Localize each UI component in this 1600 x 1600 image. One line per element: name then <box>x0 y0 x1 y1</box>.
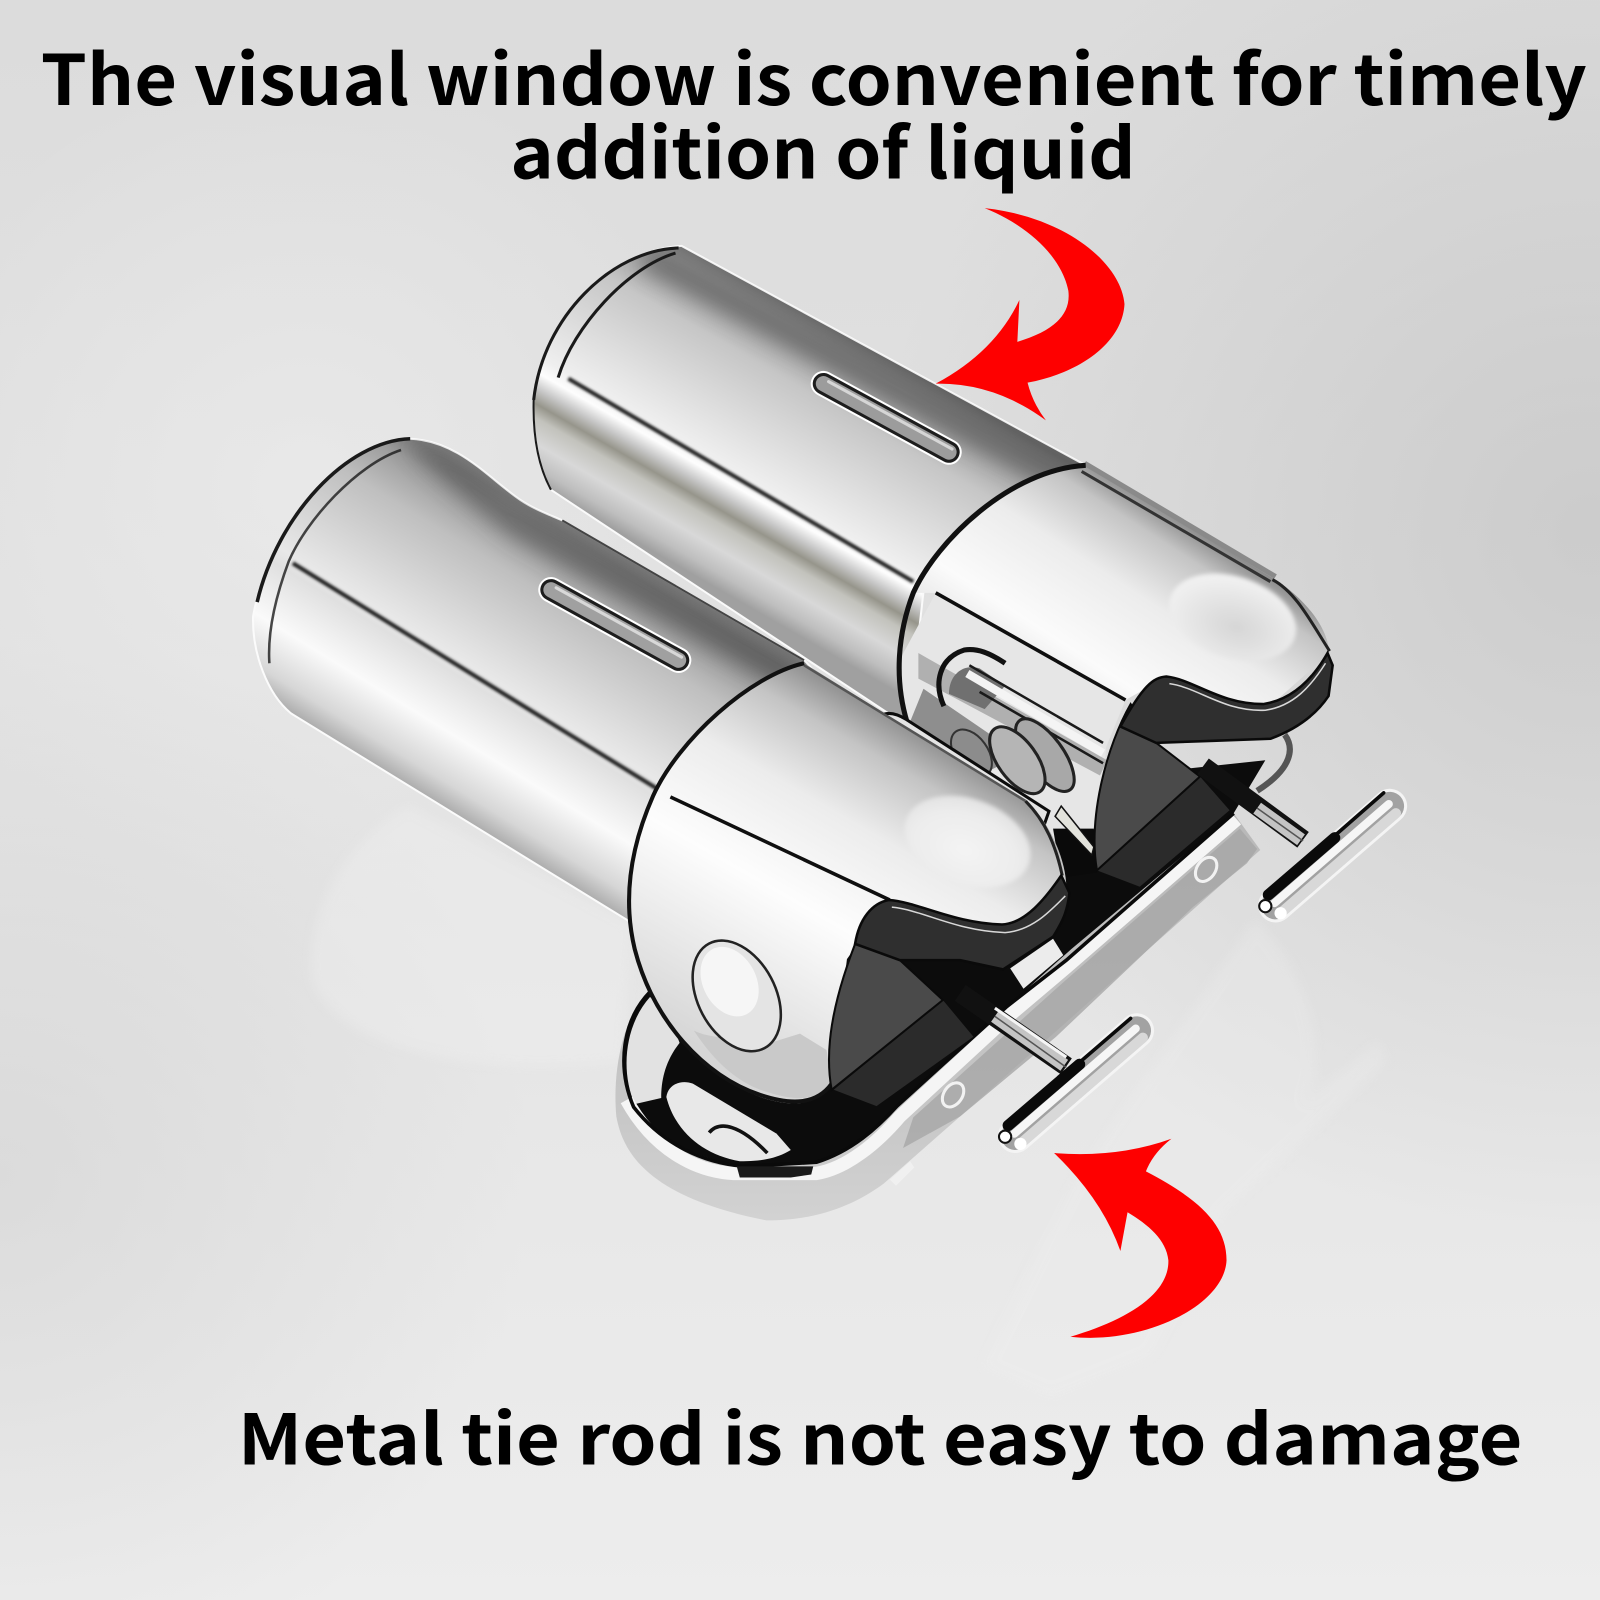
front bottle body <box>253 439 816 927</box>
front head tip outline <box>1026 801 1062 876</box>
upper body edge line <box>562 520 804 660</box>
back head ring <box>899 465 1086 722</box>
back head tip outline <box>1272 580 1330 651</box>
plate small slot <box>890 1161 914 1186</box>
title <box>41 25 1587 199</box>
neck and pump pipe <box>898 593 1126 878</box>
back visual window <box>823 382 952 452</box>
back underside lens <box>1095 704 1200 870</box>
front dark disc under head <box>834 1000 973 1106</box>
title: The visual window is convenient for timely <box>41 25 1587 125</box>
white catch under front head <box>1010 939 1063 989</box>
back dark disc under head <box>1097 777 1230 887</box>
back bottle top shading <box>638 245 1092 500</box>
front bottle soft line <box>293 563 670 797</box>
plate cavity <box>625 760 1265 1165</box>
plate screw marks <box>938 853 1221 1111</box>
back bottle soft line <box>568 379 913 582</box>
plate outer body <box>615 813 1260 1220</box>
front press dimple <box>891 779 1043 904</box>
back bottle body <box>534 246 1086 727</box>
back head <box>913 465 1330 710</box>
top red curved arrow pointing to the window <box>936 208 1124 420</box>
floor reflection of the dispenser <box>311 806 1388 1398</box>
dispenser: front unit <box>253 439 1069 1106</box>
front head <box>629 663 1066 1103</box>
plate rim dark line <box>624 813 1234 1166</box>
front stem <box>960 993 1066 1067</box>
front band highlight <box>892 896 1065 933</box>
title: addition of liquid <box>510 99 1136 199</box>
left floor patch <box>627 997 680 1104</box>
front black underside band <box>855 876 1069 969</box>
bottom red curved arrow pointing to the tie rod <box>1054 1139 1227 1338</box>
base plate <box>615 735 1290 1220</box>
caption: metal tie rod: Metal tie rod is not easy to damage <box>238 1384 1522 1484</box>
plate white rim <box>627 819 1237 1173</box>
black slot on rim <box>737 1166 813 1178</box>
back black underside band <box>1120 653 1333 743</box>
lower floor patch with screw slot <box>666 1082 791 1161</box>
front head crisp line <box>670 797 890 900</box>
back stem <box>1203 766 1303 841</box>
tie rod: front <box>960 993 1143 1150</box>
back T-bar <box>1259 793 1396 919</box>
front body top shading <box>403 441 806 694</box>
back band highlight <box>1169 663 1326 710</box>
front side button <box>675 925 799 1066</box>
front T-bar <box>999 1018 1143 1150</box>
front head lower reflection <box>694 1031 832 1098</box>
rear plate arc <box>1257 735 1290 791</box>
plate grey face <box>903 829 1257 1148</box>
tie rod: back <box>1203 766 1396 919</box>
front visual window <box>551 588 682 660</box>
back cap ring <box>534 248 679 490</box>
front cap ring <box>257 439 410 663</box>
chrome strip beside head <box>881 714 1049 829</box>
back head crisp line <box>936 593 1126 700</box>
front underside lens <box>829 944 943 1090</box>
back press dimple <box>1158 558 1307 676</box>
dispenser: back unit <box>534 245 1333 887</box>
front head ring <box>629 663 832 1102</box>
